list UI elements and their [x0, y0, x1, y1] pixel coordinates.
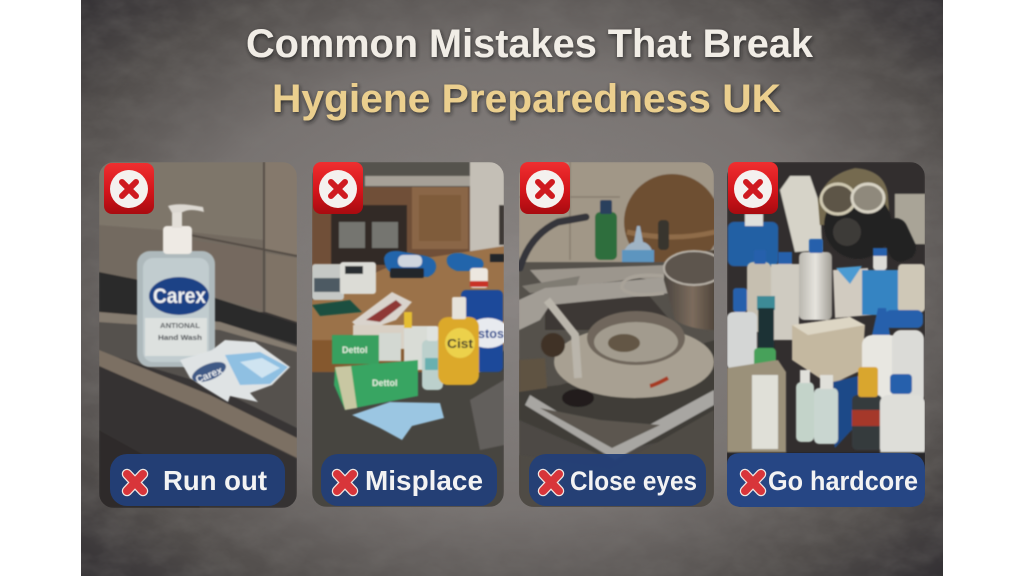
title line 1: Common Mistakes That Break: [246, 22, 814, 66]
badge: red cross: [313, 162, 363, 214]
panel: close eyes: [519, 162, 724, 507]
panel: run out: [99, 162, 297, 508]
label: close eyes: [529, 454, 706, 506]
icon: gas mask: [818, 168, 920, 266]
icon: supplies on the table: Dettol: [372, 378, 398, 388]
photo: hand wash on counter: [99, 162, 297, 508]
icon: supplies on the table: Dettol: [342, 345, 368, 355]
label: misplace: [321, 454, 497, 506]
icon: dirty plates: [519, 300, 715, 507]
icon: supplies on the table: [312, 251, 509, 440]
title line 2: Hygiene Preparedness UK: [272, 77, 781, 121]
photo: messy kitchen table: [312, 162, 504, 507]
label: run out: [110, 454, 285, 506]
icon: bottles and boxes: [727, 238, 925, 467]
icon: crumpled wipes: [180, 340, 290, 402]
icon: hand wash bottle: Carex: [153, 285, 206, 308]
label: go hardcore: [727, 453, 925, 507]
icon: hand wash bottle: Hand Wash: [158, 333, 202, 342]
label: run out: Run out: [163, 465, 267, 496]
icon: red cross: [745, 474, 761, 491]
photo: hoard of supplies: [727, 162, 925, 466]
icon: crumpled wipes: Carex: [194, 365, 225, 386]
badge: red cross: [728, 162, 778, 214]
icon: red cross: [127, 474, 143, 491]
panel: misplace: [312, 162, 509, 507]
icon: supplies on the table: Cist: [447, 336, 474, 351]
badge: red cross: [104, 163, 154, 214]
label: go hardcore: Go hardcore: [768, 466, 918, 496]
icon: hand wash bottle: ANTIONAL: [160, 323, 201, 330]
label: close eyes: Close eyes: [570, 466, 697, 496]
icon: red cross: [337, 474, 353, 491]
title: [246, 22, 814, 121]
badge: red cross: [520, 162, 570, 214]
photo: dirty sink: [519, 162, 720, 507]
icon: hand wash bottle: [137, 204, 215, 367]
icon: cooking pot: [622, 250, 724, 330]
panel: go hardcore: [727, 162, 925, 507]
label: misplace: Misplace: [365, 465, 483, 496]
icon: red cross: [543, 474, 559, 491]
icon: supplies on the table: estos: [471, 326, 504, 341]
